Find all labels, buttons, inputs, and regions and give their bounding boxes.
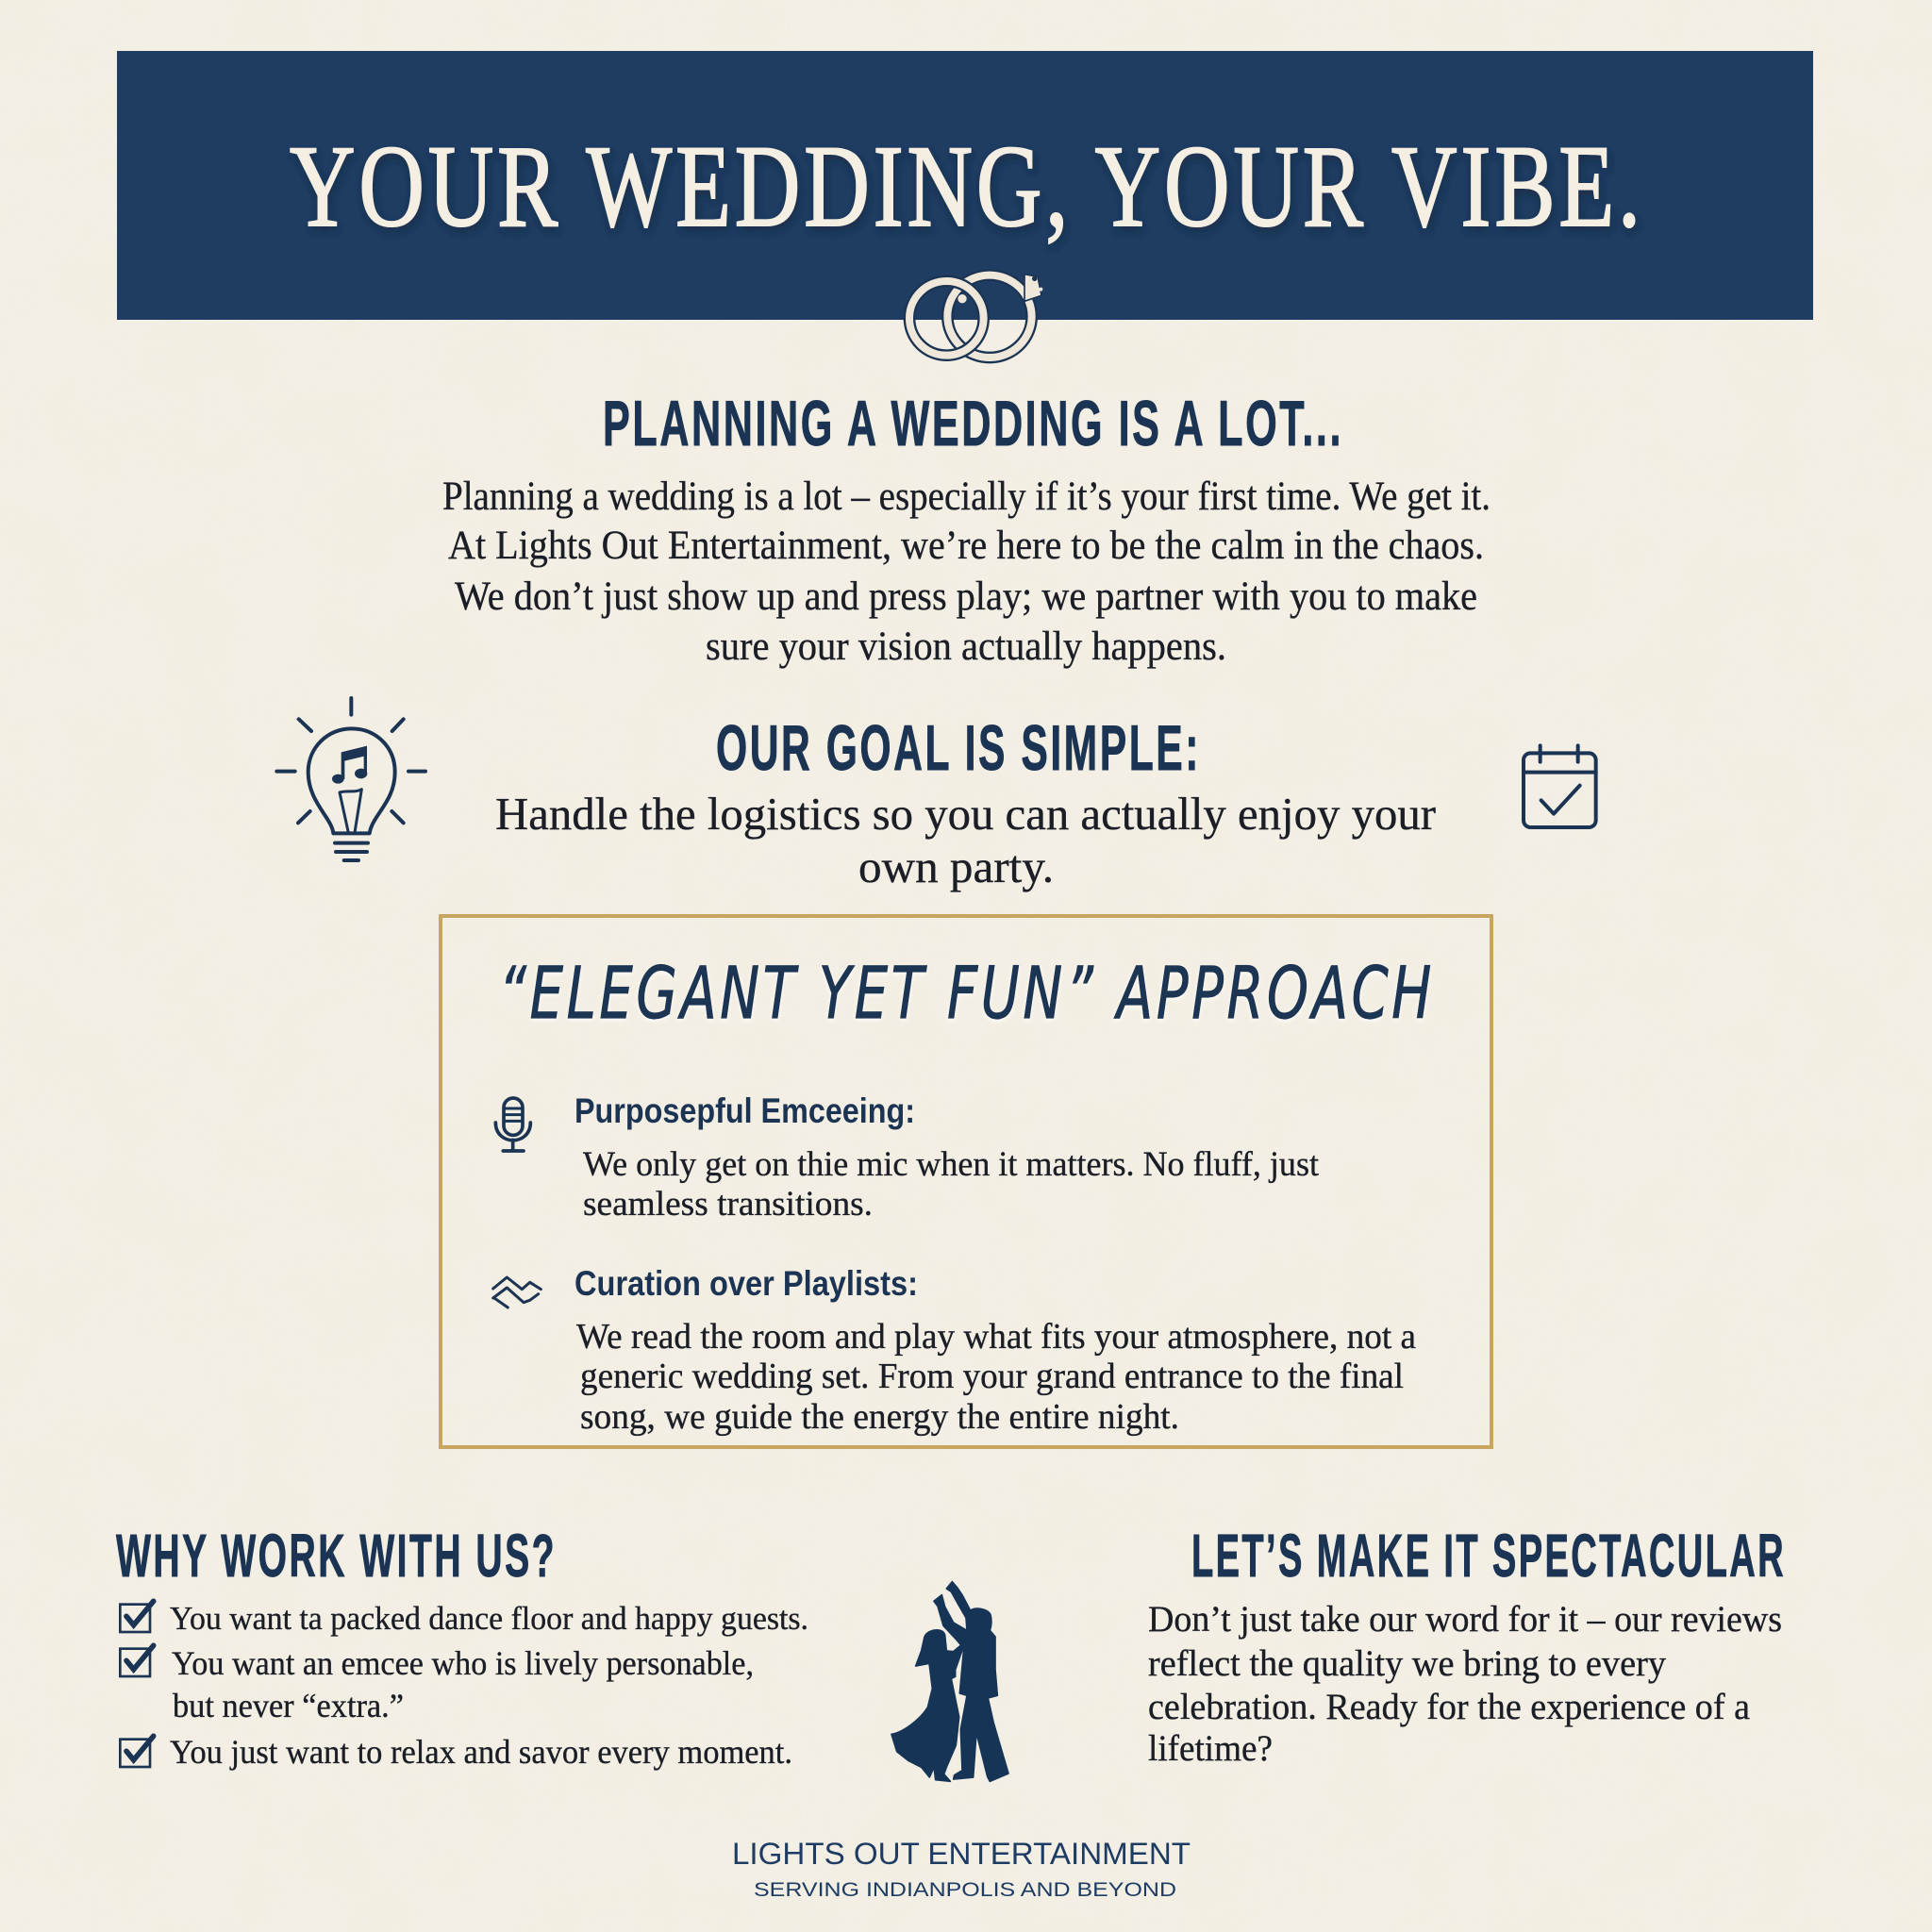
section: planning intro <box>442 388 1491 669</box>
closing paragraph <box>1148 1599 1782 1769</box>
item: purposeful emceeing: seamless transitions. <box>583 1185 873 1224</box>
icon: checkbox 3 <box>120 1736 154 1767</box>
closing paragraph: lifetime? <box>1148 1728 1273 1769</box>
goal statement: Handle the logistics so you can actually enjoy your <box>495 788 1436 840</box>
section: let's make it spectacular <box>1148 1522 1786 1769</box>
tagline: SERVING INDIANPOLIS AND BEYOND <box>754 1879 1176 1901</box>
intro paragraph: At Lights Out Entertainment, we’re here to be the calm in the chaos. <box>448 524 1484 568</box>
checklist item 1: You want ta packed dance floor and happy guests. <box>170 1600 808 1637</box>
intro paragraph: We don’t just show up and press play; we partner with you to make <box>455 575 1477 619</box>
intro paragraph: sure your vision actually happens. <box>706 625 1226 669</box>
checklist item 2 <box>172 1644 754 1724</box>
checklist item 3: You just want to relax and savor every moment. <box>170 1733 792 1771</box>
goal statement <box>495 788 1436 892</box>
item: curation over playlists: We read the room and play what fits your atmosphere, not a <box>576 1317 1416 1357</box>
item: curation over playlists: Curation over Playlists: <box>575 1264 918 1303</box>
checklist item 2: but never “extra.” <box>173 1687 404 1724</box>
closing paragraph: celebration. Ready for the experience of a <box>1148 1687 1750 1727</box>
icon: checkbox 1 <box>120 1601 154 1632</box>
panel: elegant yet fun approach <box>441 916 1491 1447</box>
intro paragraph: Planning a wedding is a lot – especially if it’s your first time. We get it. <box>442 475 1491 519</box>
icon: wave lines <box>493 1277 541 1307</box>
checklist item 2: You want an emcee who is lively personable, <box>172 1644 754 1682</box>
item: purposeful emceeing: Purposepful Emceeing: <box>575 1091 915 1130</box>
closing paragraph: reflect the quality we bring to every <box>1148 1643 1666 1684</box>
item: curation over playlists: generic wedding set. From your grand entrance to the final <box>580 1357 1404 1396</box>
intro paragraph <box>442 475 1491 669</box>
item: purposeful emceeing <box>575 1091 1320 1224</box>
icon: light bulb with music note <box>276 698 425 860</box>
icon: wedding rings <box>909 275 1042 358</box>
heading: why work with us: WHY WORK WITH US? <box>116 1522 557 1590</box>
illustration: dancing couple silhouette <box>891 1582 1008 1781</box>
panel heading: “ELEGANT YET FUN” APPROACH <box>499 951 1435 1035</box>
item: purposeful emceeing: We only get on thie mic when it matters. No fluff, just <box>583 1145 1320 1184</box>
company name: LIGHTS OUT ENTERTAINMENT <box>732 1837 1191 1871</box>
item: curation over playlists <box>575 1264 1416 1437</box>
footer <box>732 1837 1191 1901</box>
icon: checkbox 2 <box>120 1645 154 1676</box>
icon: calendar with check <box>1524 745 1596 827</box>
item: curation over playlists: song, we guide the energy the entire night. <box>580 1397 1179 1437</box>
section: why work with us <box>116 1522 808 1771</box>
header banner <box>117 51 1813 320</box>
section: our goal <box>495 712 1436 892</box>
heading: planning a wedding: PLANNING A WEDDING IS A LOT... <box>603 388 1343 459</box>
closing paragraph: Don’t just take our word for it – our reviews <box>1148 1599 1782 1640</box>
heading: our goal: OUR GOAL IS SIMPLE: <box>716 712 1201 784</box>
icon: microphone <box>495 1098 530 1151</box>
goal statement: own party. <box>858 841 1054 892</box>
